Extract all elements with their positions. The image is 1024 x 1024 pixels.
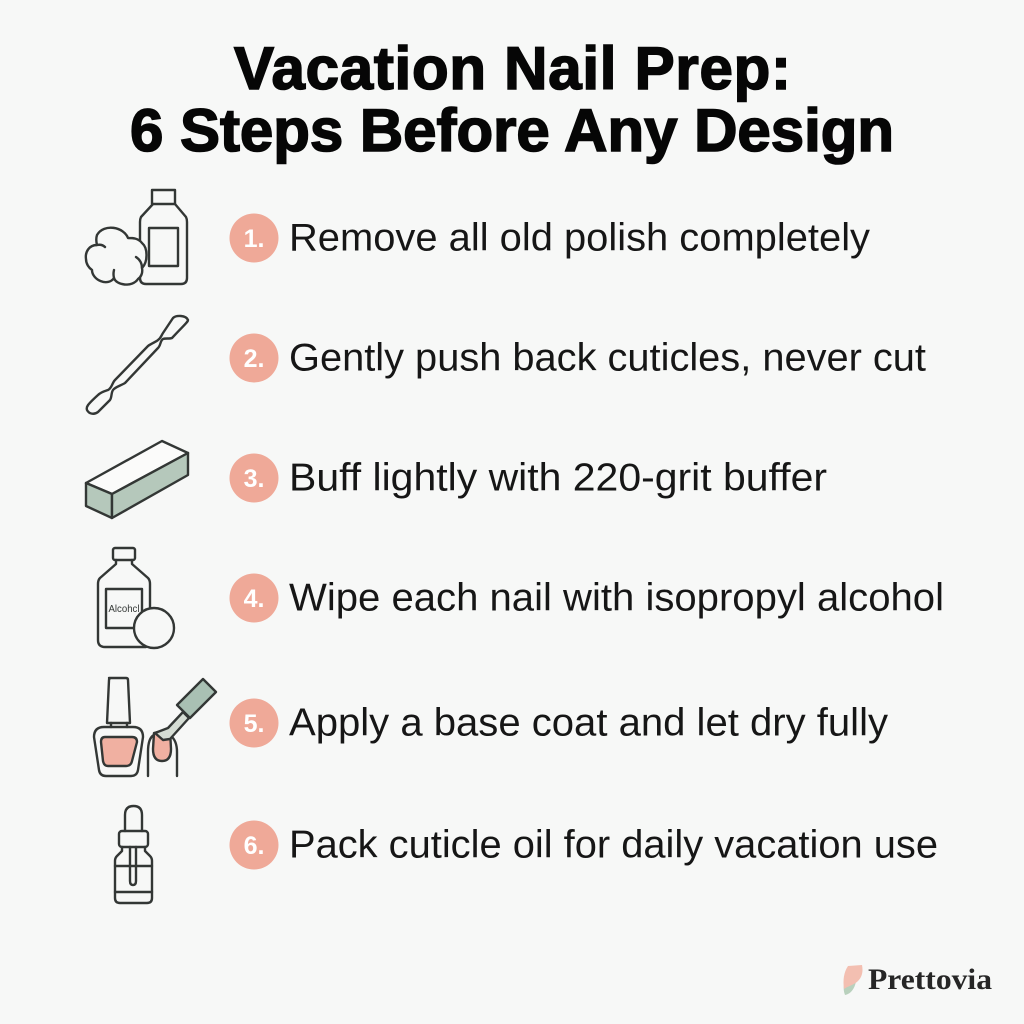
step 3: 3. [244,465,264,493]
icon: cuticle pusher [87,316,188,414]
icon: alcohol bottle and cotton pad [98,548,174,648]
step 1: Remove all old polish completely [289,216,871,260]
logo: Prettovia: Prettovia [868,963,992,996]
step 6: Pack cuticle oil for daily vacation use [289,824,938,866]
title [130,35,894,164]
step 5: Apply a base coat and let dry fully [289,702,889,744]
step 1: 1. [244,225,264,253]
step 5: 5. [244,710,264,738]
step 2: Gently push back cuticles, never cut [289,336,926,380]
step 4: 4. [244,585,264,613]
icon: cotton and remover bottle [86,190,187,285]
step 3: Buff lightly with 220-grit buffer [289,456,827,500]
icon: cuticle oil dropper bottle [115,806,152,903]
icon: nail polish bottle and brush on finger [94,678,216,776]
icon: nail buffer block [86,441,188,518]
title: Vacation Nail Prep: [234,35,791,102]
step 4: Wipe each nail with isopropyl alcohol [289,576,944,620]
title: 6 Steps Before Any Design [130,97,894,164]
step 2: 2. [244,345,264,373]
step 6: 6. [244,832,264,860]
icon: alcohol bottle and cotton pad: Alcohcl [108,603,140,615]
